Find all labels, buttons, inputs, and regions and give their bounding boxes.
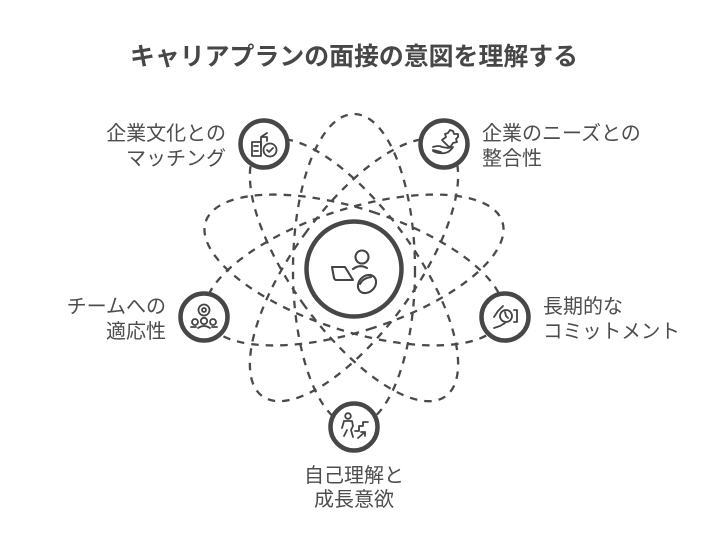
icon: person with laptop [332, 250, 380, 297]
label: company needs: 整合性 [482, 147, 542, 170]
central hub [306, 222, 402, 316]
label: team fit [67, 296, 166, 343]
node: company needs [420, 120, 468, 168]
dashed orbits [187, 108, 521, 432]
label: company culture [106, 122, 226, 170]
icon: gear and team [191, 304, 217, 328]
title: キャリアプランの面接の意図を理解する [130, 43, 578, 71]
label: company needs [482, 122, 641, 170]
node: self understanding [330, 404, 378, 450]
label: self understanding: 成長意欲 [314, 488, 394, 511]
node: team fit [180, 294, 228, 340]
label: team fit: 適応性 [106, 320, 166, 343]
label: self understanding: 自己理解と [304, 464, 404, 487]
label: commitment: コミットメント [543, 321, 680, 343]
label: self understanding [304, 464, 404, 511]
label: company culture: マッチング [126, 147, 226, 170]
node: company culture [240, 120, 288, 168]
label: commitment: 長期的な [543, 295, 623, 318]
label: commitment [543, 295, 680, 343]
icon: person climbing stairs [342, 413, 368, 438]
label: company culture: 企業文化との [106, 122, 226, 145]
label: team fit: チームへの [67, 296, 166, 318]
label: company needs: 企業のニーズとの [482, 122, 641, 145]
icon: hand with stopwatch [494, 306, 517, 328]
node: commitment [482, 294, 528, 340]
icon: buildings with check [252, 133, 276, 156]
icon: puzzle on hand [433, 130, 458, 153]
